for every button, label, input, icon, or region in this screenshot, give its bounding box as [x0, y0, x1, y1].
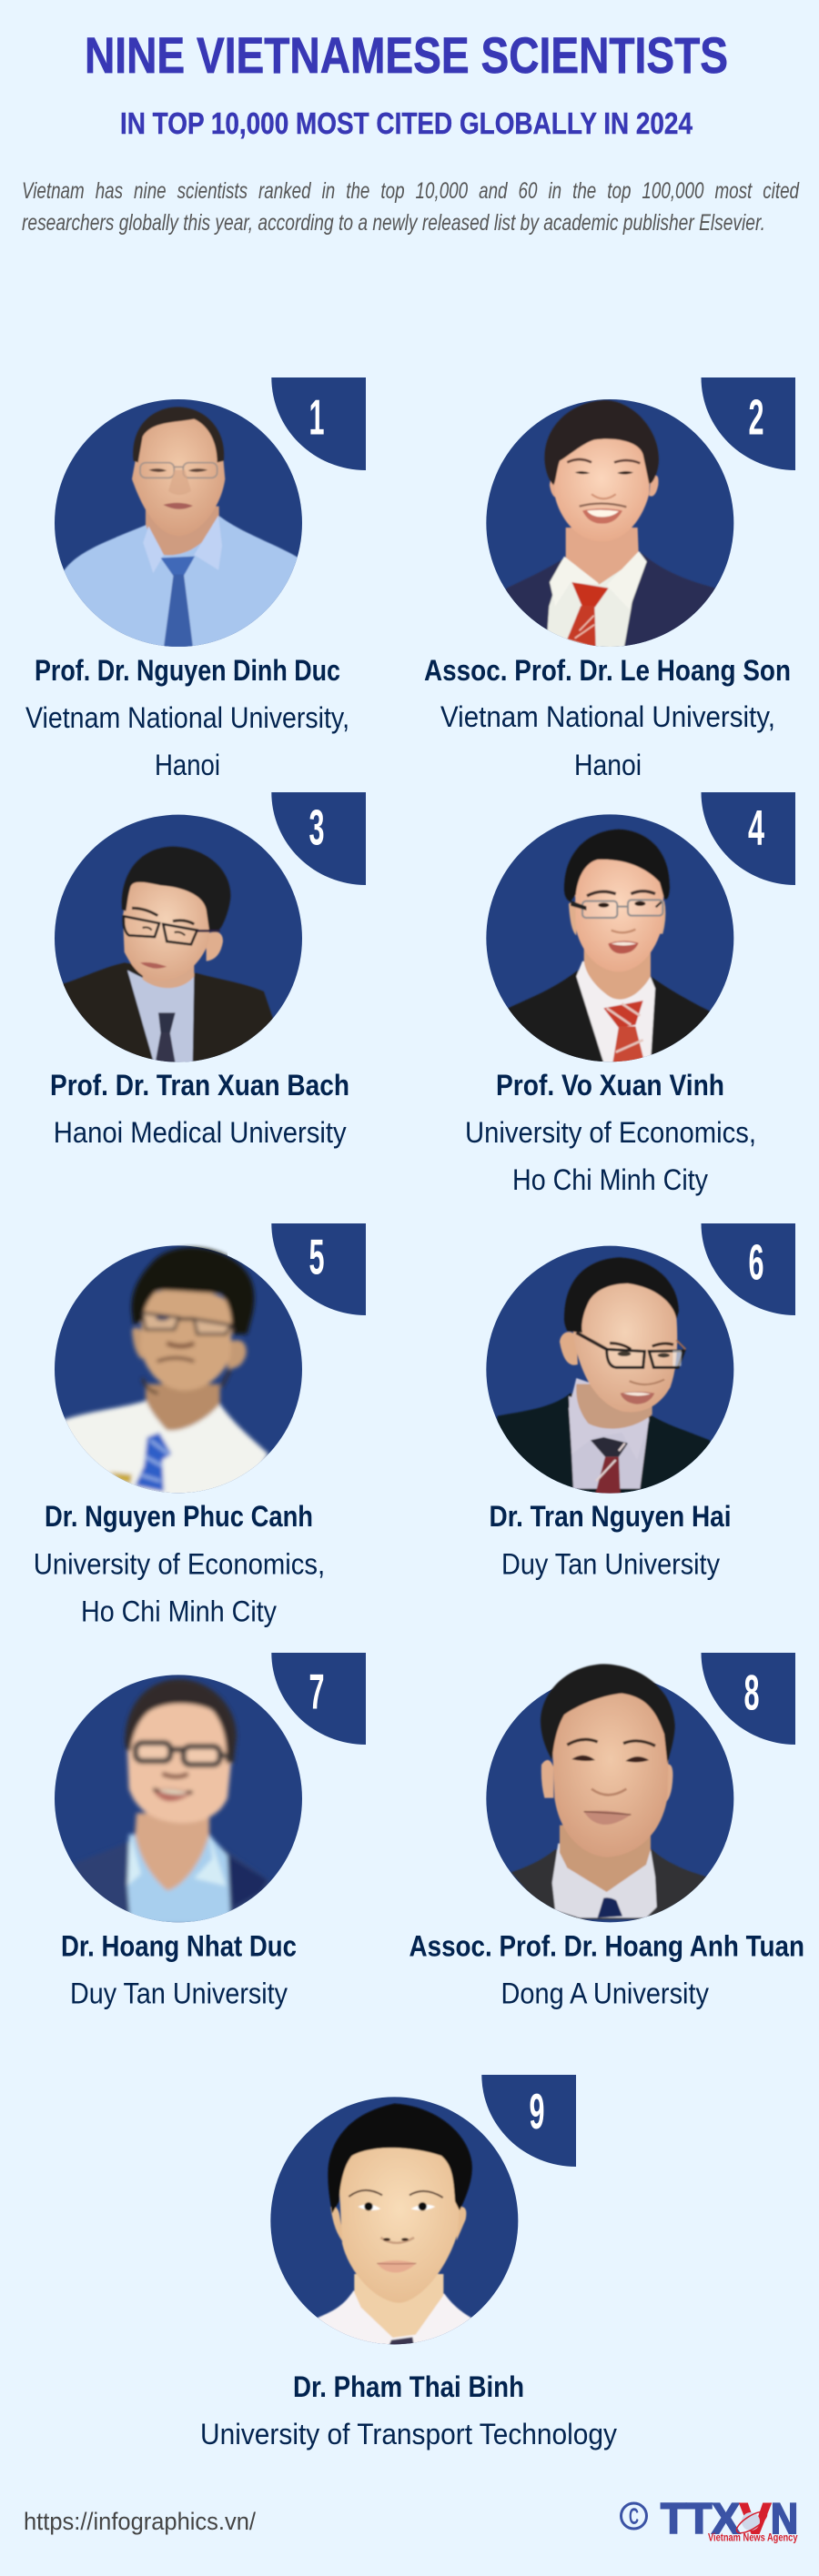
portrait: Nguyen Phuc Canh [55, 1245, 302, 1503]
rank badge 1: 1 [309, 389, 324, 446]
name: Dr. Tran Nguyen Hai [490, 1500, 732, 1533]
subtitle: IN TOP 10,000 MOST CITED GLOBALLY IN 2024 [120, 106, 693, 140]
panel: scientist 3 [50, 792, 366, 1149]
name: Dr. Pham Thai Binh [293, 2370, 524, 2403]
portrait: Tran Nguyen Hai [486, 1246, 733, 1503]
portrait: Pham Thai Binh [270, 2097, 518, 2347]
affiliation: Hanoi Medical University [54, 1116, 347, 1149]
icon: copyright: C [629, 2504, 639, 2530]
source url: https://infographics.vn/ [24, 2508, 256, 2535]
affiliation: Duy Tan University [501, 1548, 720, 1581]
affiliation: Ho Chi Minh City [81, 1595, 277, 1628]
rank badge 9 [481, 2075, 576, 2167]
name: Dr. Hoang Nhat Duc [61, 1930, 297, 1963]
rank badge 4: 4 [748, 799, 764, 855]
affiliation: Dong A University [500, 1977, 709, 2010]
rank badge 8: 8 [744, 1664, 759, 1720]
affiliation: Hanoi [155, 749, 220, 781]
affiliation [34, 1548, 325, 1628]
intro text [22, 178, 800, 236]
affiliation [465, 1116, 756, 1196]
icon: copyright [621, 2503, 646, 2530]
logo: TTXVN: N [771, 2494, 798, 2542]
affiliation: Ho Chi Minh City [512, 1163, 708, 1196]
panel: scientist 8 [410, 1653, 804, 2010]
rank badge 2 [701, 377, 795, 470]
panel: scientist 6 [486, 1223, 795, 1581]
name: Prof. Dr. Tran Xuan Bach [50, 1069, 349, 1102]
affiliation: University of Transport Technology [200, 2418, 617, 2450]
rank badge 7 [271, 1653, 366, 1745]
rank badge 6: 6 [748, 1234, 764, 1291]
logo caption: Vietnam News Agency [708, 2532, 798, 2543]
affiliation: University of Economics, [34, 1548, 325, 1581]
logo: TTXVN [661, 2494, 798, 2542]
copyright logo [621, 2494, 798, 2543]
affiliation: Hanoi [574, 749, 642, 781]
affiliation: University of Economics, [465, 1116, 756, 1149]
portrait: Hoang Anh Tuan [486, 1664, 733, 1922]
panel: scientist 9 [200, 2075, 617, 2450]
portrait: Hoang Nhat Duc [55, 1675, 302, 1935]
panel: scientist 7 [55, 1653, 366, 2010]
portrait: Le Hoang Son [482, 399, 737, 652]
rank badge 3: 3 [309, 799, 324, 855]
panel: scientist 5 [34, 1223, 366, 1628]
rank badge 9: 9 [530, 2083, 544, 2139]
panel: scientist 1 [25, 377, 366, 781]
affiliation [440, 700, 775, 781]
rank badge 2: 2 [748, 389, 764, 446]
logo: TTXVN: TTX [661, 2494, 740, 2542]
portrait: Tran Xuan Bach [55, 815, 302, 1071]
rank badge 8 [701, 1653, 795, 1745]
portrait: Vo Xuan Vinh [486, 814, 733, 1071]
affiliation: Duy Tan University [70, 1977, 288, 2010]
rank badge 6 [701, 1223, 795, 1315]
rank badge 1 [271, 377, 366, 470]
rank badge 4 [701, 792, 795, 885]
name: Prof. Vo Xuan Vinh [496, 1069, 724, 1102]
rank badge 7: 7 [309, 1663, 324, 1719]
affiliation: Vietnam National University, [440, 700, 775, 733]
affiliation [25, 701, 349, 781]
rank badge 5 [271, 1223, 366, 1315]
portrait: Nguyen Dinh Duc [46, 399, 307, 652]
panel: scientist 4 [465, 792, 795, 1196]
panel: scientist 2 [424, 377, 795, 781]
name: Dr. Nguyen Phuc Canh [45, 1500, 313, 1533]
name: Prof. Dr. Nguyen Dinh Duc [35, 654, 340, 687]
rank badge 5: 5 [309, 1229, 324, 1285]
affiliation: Vietnam National University, [25, 701, 349, 734]
rank badge 3 [271, 792, 366, 885]
logo: TTXVN: V [740, 2494, 772, 2542]
